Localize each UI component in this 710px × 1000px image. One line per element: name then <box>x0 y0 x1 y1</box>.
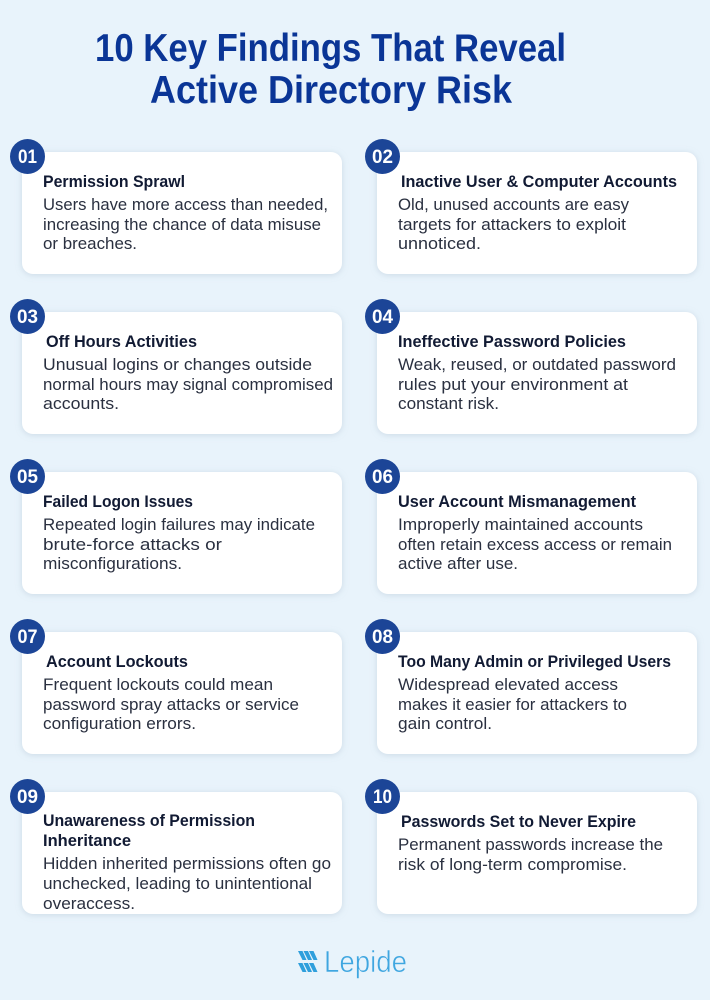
panel: 07 Account Lockouts: configuration errors. <box>43 715 196 733</box>
panel: 02 Inactive User & Computer Accounts: unnoticed. <box>398 235 481 253</box>
panel: 10 Passwords Set to Never Expire: Permanent passwords increase the <box>398 836 663 854</box>
panel: 02 Inactive User & Computer Accounts: targets for attackers to exploit <box>398 216 626 234</box>
panel: 04 Ineffective Password Policies: rules put your environment at <box>398 376 628 394</box>
panel: 09 Unawareness of Permission Inheritance: overaccess. <box>43 895 135 913</box>
panel: 10 Passwords Set to Never Expire: risk of long-term compromise. <box>398 856 627 874</box>
panel: 04 Ineffective Password Policies: constant risk. <box>398 395 499 413</box>
panel: 06 User Account Mismanagement: often retain excess access or remain <box>398 536 672 554</box>
panel: 02 Inactive User & Computer Accounts: Old, unused accounts are easy <box>398 196 630 214</box>
panel: 10 Passwords Set to Never Expire: 10 <box>373 787 392 808</box>
panel: 01 Permission Sprawl: Users have more access than needed, <box>43 196 328 214</box>
panel: 08 Too Many Admin or Privileged Users: Too Many Admin or Privileged Users <box>398 653 671 671</box>
title: 10 Key Findings That Reveal <box>95 27 566 70</box>
panel: 07 Account Lockouts: Frequent lockouts could mean <box>43 676 273 694</box>
panel: 03 Off Hours Activities: Off Hours Activities <box>46 333 197 351</box>
panel: 06 User Account Mismanagement: User Account Mismanagement <box>398 493 636 511</box>
panel: 06 User Account Mismanagement <box>365 459 697 594</box>
panel: 09 Unawareness of Permission Inheritance: 09 <box>17 787 38 808</box>
panel: 05 Failed Logon Issues <box>10 459 342 594</box>
panel: 03 Off Hours Activities <box>10 299 342 434</box>
panel: 07 Account Lockouts: password spray attacks or service <box>43 696 299 714</box>
panel: 08 Too Many Admin or Privileged Users: gain control. <box>398 715 492 733</box>
panel: 04 Ineffective Password Policies: Weak, reused, or outdated password <box>398 356 676 374</box>
panel: 10 Passwords Set to Never Expire <box>365 779 697 914</box>
panel: 01 Permission Sprawl <box>10 139 342 274</box>
panel: 01 Permission Sprawl: or breaches. <box>43 235 137 253</box>
panel: 09 Unawareness of Permission Inheritance <box>10 779 342 914</box>
panel: 03 Off Hours Activities: accounts. <box>43 395 119 413</box>
panel: 04 Ineffective Password Policies <box>365 299 697 434</box>
panel: 05 Failed Logon Issues: misconfigurations. <box>43 555 182 573</box>
panel: 07 Account Lockouts: 07 <box>18 627 38 648</box>
panel: 01 Permission Sprawl: increasing the chance of data misuse <box>43 216 321 234</box>
panel: 01 Permission Sprawl: Permission Sprawl <box>43 173 185 191</box>
panel: 03 Off Hours Activities: Unusual logins or changes outside <box>43 356 312 374</box>
panel: 02 Inactive User & Computer Accounts <box>365 139 697 274</box>
panel: 03 Off Hours Activities: 03 <box>17 307 38 328</box>
panel: 06 User Account Mismanagement: Improperly maintained accounts <box>398 516 643 534</box>
panel: 08 Too Many Admin or Privileged Users: makes it easier for attackers to <box>398 696 627 714</box>
title: Active Directory Risk <box>150 69 513 112</box>
panel: 05 Failed Logon Issues: brute-force attacks or <box>43 536 223 554</box>
panel: 05 Failed Logon Issues: Repeated login failures may indicate <box>43 516 315 534</box>
panel: 02 Inactive User & Computer Accounts: 02 <box>372 147 393 168</box>
panel: 02 Inactive User & Computer Accounts: Inactive User & Computer Accounts <box>401 173 677 191</box>
panel: 08 Too Many Admin or Privileged Users <box>365 619 697 754</box>
panel: 07 Account Lockouts <box>10 619 342 754</box>
panel: 05 Failed Logon Issues: 05 <box>17 467 38 488</box>
panel: 09 Unawareness of Permission Inheritance: Hidden inherited permissions often go <box>43 855 331 873</box>
panel: 04 Ineffective Password Policies: 04 <box>372 307 393 328</box>
panel: 09 Unawareness of Permission Inheritance: Inheritance <box>43 832 131 850</box>
logo: Lepide: Lepide <box>324 944 407 979</box>
title <box>95 27 566 112</box>
panel: 10 Passwords Set to Never Expire: Passwords Set to Never Expire <box>401 813 636 831</box>
panel: 09 Unawareness of Permission Inheritance: Unawareness of Permission <box>43 812 255 830</box>
logo: Lepide <box>298 944 407 979</box>
panel: 01 Permission Sprawl: 01 <box>18 147 37 168</box>
panel: 09 Unawareness of Permission Inheritance: unchecked, leading to unintentional <box>43 875 312 893</box>
panel: 06 User Account Mismanagement: active after use. <box>398 555 518 573</box>
panel: 05 Failed Logon Issues: Failed Logon Issues <box>43 493 193 511</box>
panel: 04 Ineffective Password Policies: Ineffective Password Policies <box>398 333 626 351</box>
panel: 08 Too Many Admin or Privileged Users: Widespread elevated access <box>398 676 618 694</box>
panel: 07 Account Lockouts: Account Lockouts <box>46 653 188 671</box>
panel: 06 User Account Mismanagement: 06 <box>372 467 393 488</box>
panel: 08 Too Many Admin or Privileged Users: 08 <box>372 627 393 648</box>
panel: 03 Off Hours Activities: normal hours may signal compromised <box>43 376 333 394</box>
